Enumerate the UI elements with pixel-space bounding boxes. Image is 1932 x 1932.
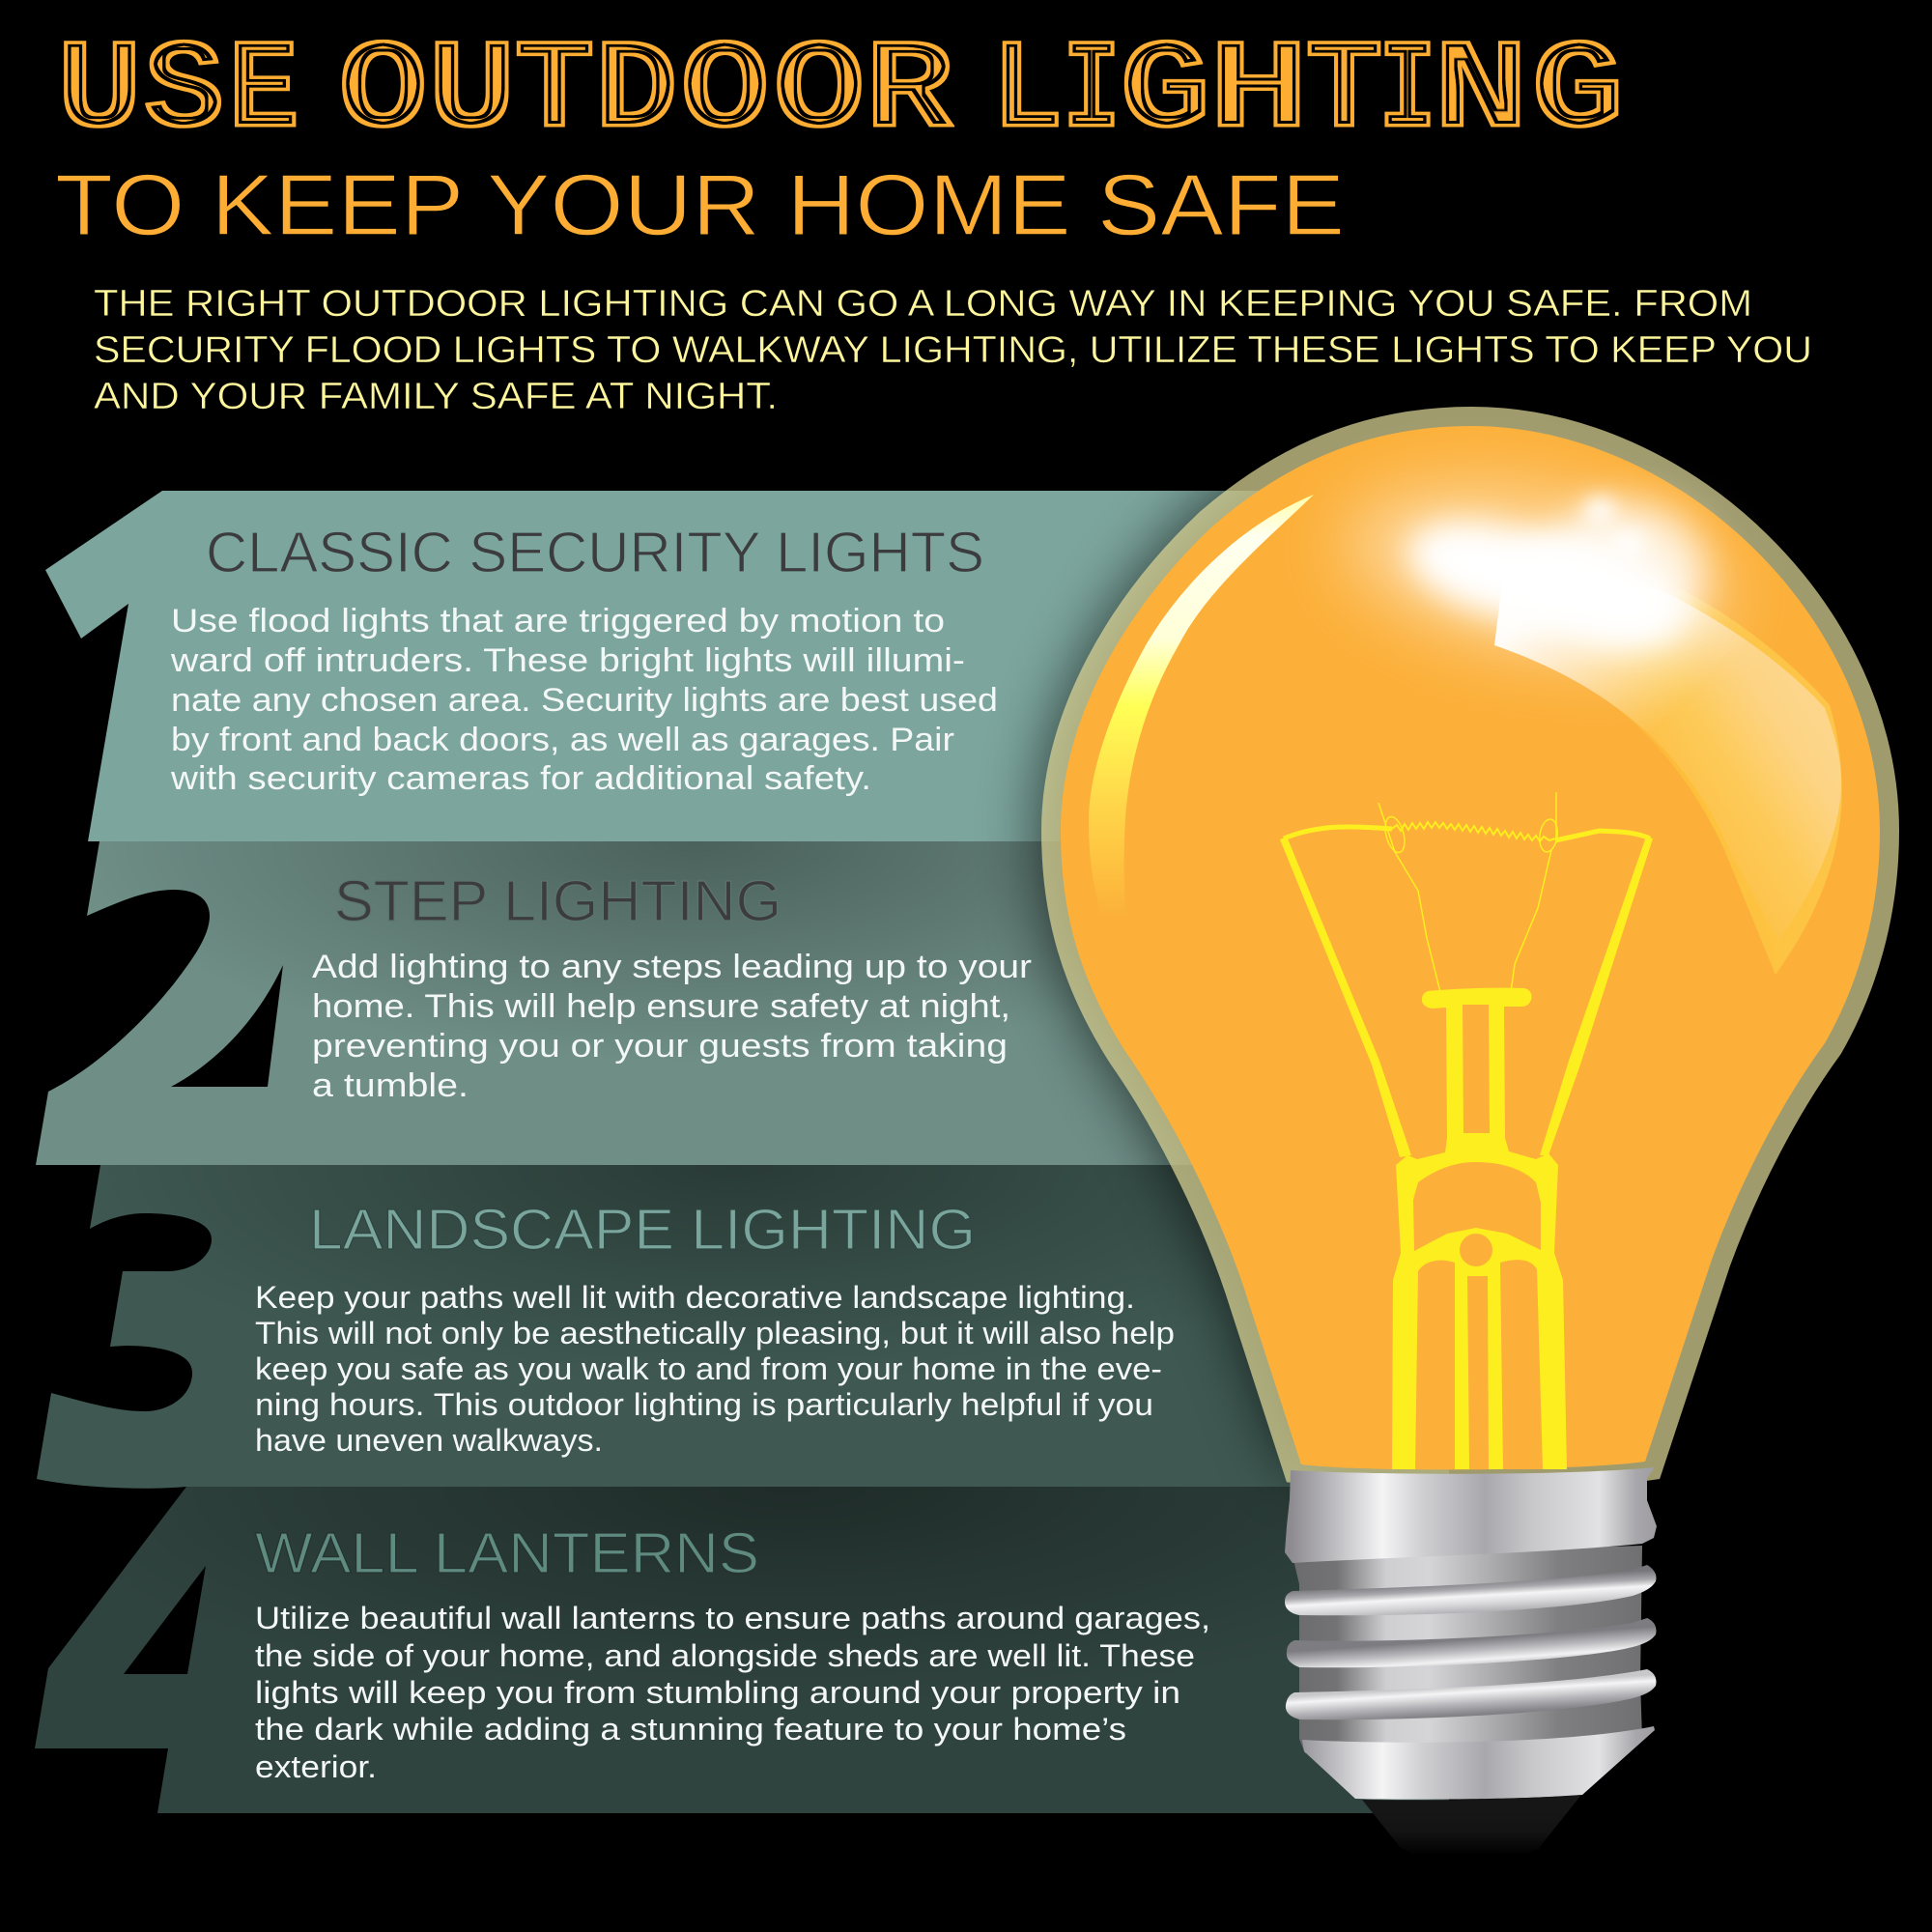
panel 1 text [170, 521, 998, 797]
panel 4 text: the dark while adding a stunning feature to your home’s [255, 1712, 1126, 1747]
intro paragraph: SECURITY FLOOD LIGHTS TO WALKWAY LIGHTING, UTILIZE THESE LIGHTS TO KEEP YOU [94, 329, 1812, 371]
panel 2 text: a tumble. [312, 1067, 469, 1104]
title: O [337, 19, 429, 166]
title: O [679, 19, 771, 166]
panel 1 band with numeral 1 [45, 491, 1449, 841]
panel 4 band with numeral 4 [35, 1487, 1449, 1813]
screw socket [1285, 1467, 1657, 1854]
panel 4 text [255, 1521, 1210, 1784]
intro paragraph: AND YOUR FAMILY SAFE AT NIGHT. [94, 376, 778, 417]
panel 1 text: ward off intruders. These bright lights will illumi- [170, 642, 965, 679]
title: U [55, 19, 144, 166]
title: E [227, 19, 300, 166]
left crescent highlight [1089, 495, 1314, 918]
right reflection [1494, 576, 1842, 975]
title: I [1062, 19, 1122, 166]
panel 1 text: CLASSIC SECURITY LIGHTS [206, 521, 984, 584]
title: L [990, 19, 1065, 166]
bulb shadow on panels [1041, 405, 1897, 1470]
panel 1 text: Use flood lights that are triggered by motion to [171, 603, 945, 639]
panel 3 text [255, 1198, 1175, 1458]
panel 3 text: Keep your paths well lit with decorative landscape lighting. [255, 1280, 1135, 1315]
title: D [593, 19, 679, 166]
title: O [772, 19, 867, 166]
panel 4 text: exterior. [255, 1749, 377, 1784]
panel 4 text: WALL LANTERNS [255, 1521, 759, 1585]
filament and support wires [1280, 792, 1653, 1157]
panel 3 text: ning hours. This outdoor lighting is particularly helpful if you [255, 1387, 1153, 1422]
intro paragraph [94, 283, 1812, 417]
title: T [1304, 19, 1384, 166]
title: U [426, 19, 518, 166]
panel 2 band with numeral 2 [36, 841, 1449, 1165]
panel 2 text: Add lighting to any steps leading up to your [312, 949, 1032, 985]
white glare [1331, 456, 1741, 684]
panel 2 text: STEP LIGHTING [334, 869, 781, 933]
panel 3 text: keep you safe as you walk to and from your home in the eve- [255, 1351, 1162, 1386]
title: T [513, 19, 596, 166]
filament stem [1392, 988, 1567, 1469]
panel 1 text: nate any chosen area. Security lights are best used [171, 682, 998, 719]
title: G [1119, 19, 1212, 166]
light bulb [1061, 426, 1880, 1854]
panel 4 text: the side of your home, and alongside sheds are well lit. These [255, 1638, 1195, 1673]
panel 2 text: preventing you or your guests from taking [312, 1028, 1008, 1065]
panel 3 band with numeral 3 [37, 1165, 1449, 1489]
panel 2 text [312, 869, 1032, 1104]
panel 4 text: Utilize beautiful wall lanterns to ensure paths around garages, [255, 1601, 1210, 1635]
panel 3 text: have uneven walkways. [255, 1423, 603, 1458]
panel 1 text: with security cameras for additional safety. [170, 760, 871, 797]
title: S [143, 19, 225, 166]
title: N [1432, 19, 1530, 166]
title: G [1530, 19, 1626, 166]
panel 1 text: by front and back doors, as well as garages. Pair [171, 722, 954, 758]
socket contact tip [1362, 1795, 1581, 1854]
panel 2 text: home. This will help ensure safety at night, [312, 988, 1010, 1025]
subtitle: TO KEEP YOUR HOME SAFE [55, 157, 1345, 254]
title: R [864, 19, 955, 166]
panel 3 text: LANDSCAPE LIGHTING [309, 1198, 976, 1262]
title: H [1207, 19, 1311, 166]
intro paragraph: THE RIGHT OUTDOOR LIGHTING CAN GO A LONG WAY IN KEEPING YOU SAFE. FROM [94, 283, 1752, 325]
bulb glass [1061, 426, 1880, 1469]
panel 3 text: This will not only be aesthetically pleasing, but it will also help [255, 1316, 1175, 1350]
title: I [1378, 19, 1437, 166]
panel 4 text: lights will keep you from stumbling around your property in [255, 1675, 1180, 1710]
title [55, 19, 1626, 166]
